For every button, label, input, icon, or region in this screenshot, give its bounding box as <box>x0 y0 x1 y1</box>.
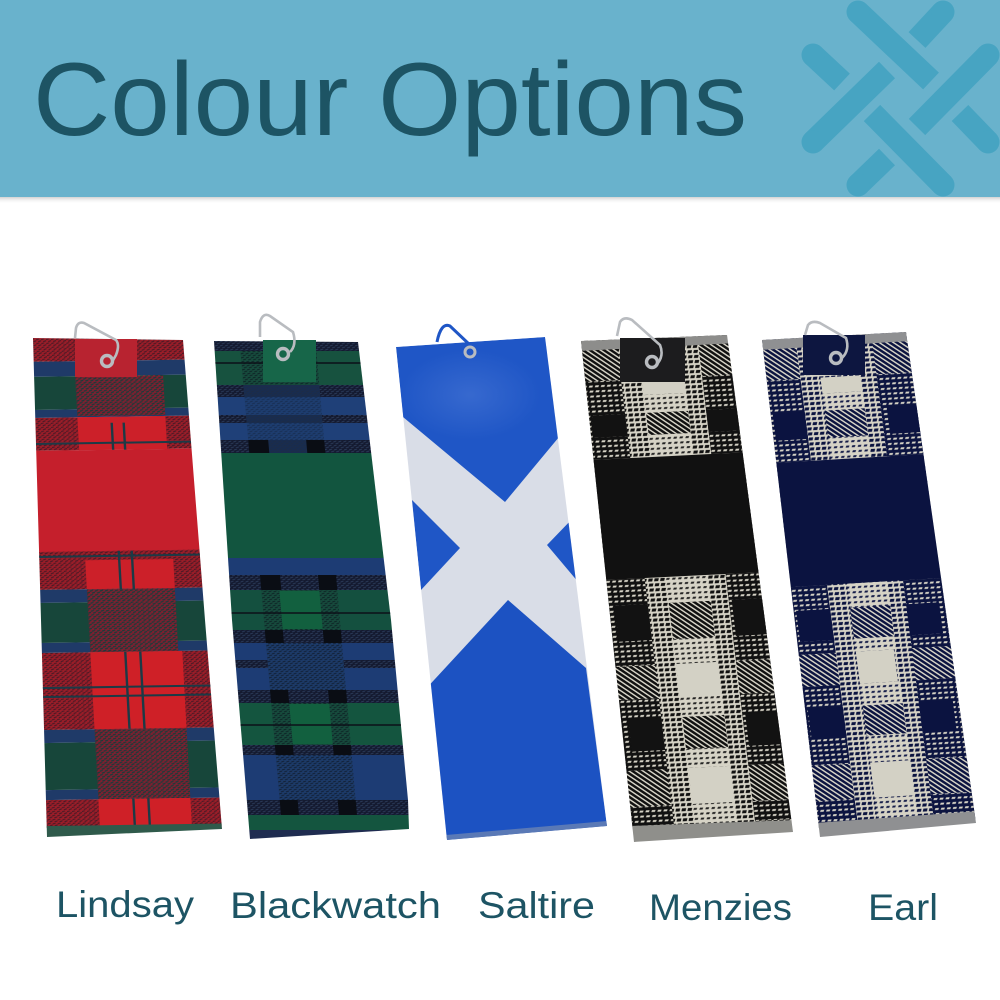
eyelet <box>465 347 475 357</box>
metal clip <box>617 318 662 368</box>
metal clip <box>805 322 847 364</box>
metal clip <box>75 323 118 366</box>
label: Lindsay: Lindsay <box>56 884 195 925</box>
hanging tab <box>75 339 137 377</box>
towel: Earl <box>762 320 976 837</box>
hanging tab <box>620 338 685 382</box>
icon: woven cross logo <box>802 0 1000 196</box>
metal clip <box>260 315 294 360</box>
hanging tab <box>263 340 316 382</box>
towel: Lindsay <box>33 321 222 837</box>
towel: Menzies <box>581 317 793 842</box>
hanging tab <box>803 335 865 375</box>
towel: Saltire <box>396 324 607 840</box>
towel: Blackwatch <box>214 314 409 839</box>
label: Menzies: Menzies <box>649 887 792 928</box>
label: Earl: Earl <box>868 887 938 928</box>
header banner <box>0 0 1000 204</box>
label: Blackwatch: Blackwatch <box>230 885 441 926</box>
label: Saltire: Saltire <box>478 885 595 926</box>
title: Colour Options <box>33 42 747 158</box>
blue hanging loop <box>437 325 470 345</box>
